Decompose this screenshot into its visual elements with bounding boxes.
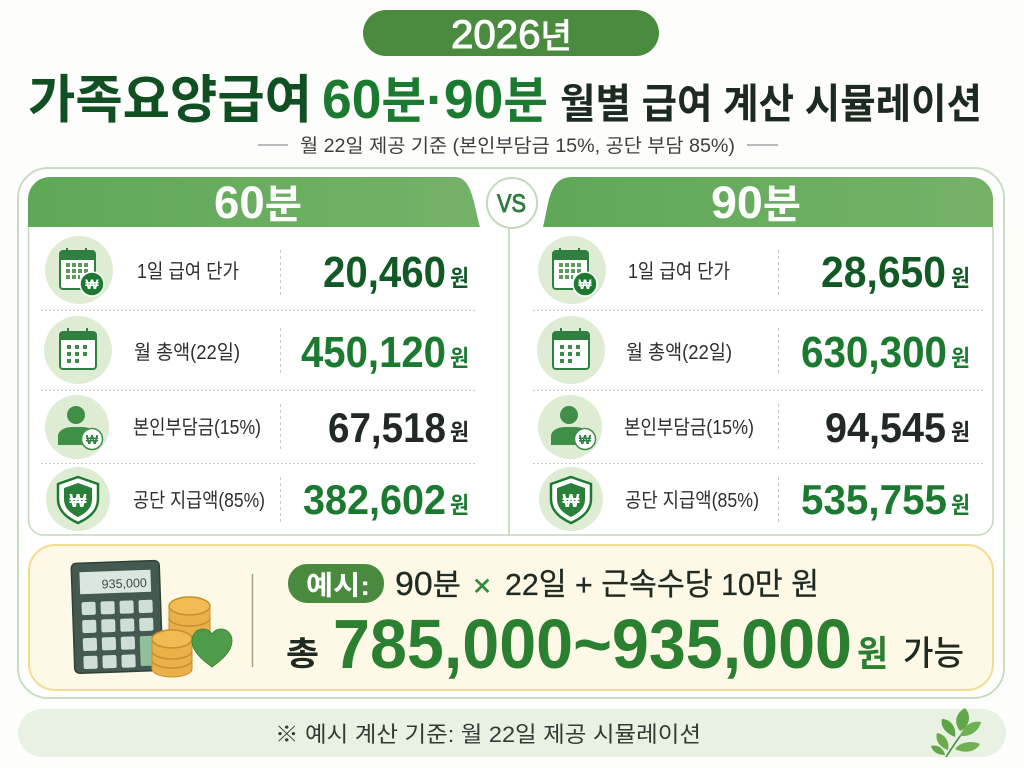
- icon: person with won: [45, 395, 109, 459]
- row: 본인부담금: [538, 395, 970, 459]
- title: [28, 68, 982, 130]
- panel: 60분: [28, 177, 509, 535]
- row: 월 총액: 월 총액(22일): [626, 341, 732, 364]
- icon: calendar: [44, 316, 112, 384]
- icon: calendar with won: ₩: [85, 276, 99, 292]
- year pill: [363, 10, 659, 57]
- row: 1일 급여 단가: 원: [951, 265, 970, 291]
- row: 공단 지급액: [46, 467, 469, 531]
- total amount: 원: [857, 633, 888, 674]
- icon: calculator, coins and heart: 935,000: [101, 576, 147, 591]
- row: 월 총액: 630,300: [801, 328, 947, 377]
- example formula: 22일 + 근속수당 10만 원: [505, 567, 819, 602]
- icon: calendar with won: ₩: [578, 276, 592, 292]
- icon: person with won: ₩: [579, 432, 592, 447]
- row: 본인부담금: [45, 395, 469, 459]
- subtitle: 월 22일 제공 기준 (본인부담금 15%, 공단 부담 85%): [300, 135, 735, 157]
- row: 공단 지급액: 공단 지급액(85%): [133, 489, 265, 512]
- icon: calendar: [537, 316, 605, 384]
- row: 1일 급여 단가: [538, 236, 970, 304]
- row: 본인부담금: 원: [951, 419, 970, 445]
- row: 1일 급여 단가: 1일 급여 단가: [628, 260, 730, 283]
- total amount: 785,000~935,000: [333, 605, 852, 683]
- icon: calendar with won: [45, 236, 113, 304]
- heading: 60분: [28, 177, 480, 228]
- heading: 60분: 60분: [214, 177, 302, 228]
- row: 공단 지급액: [539, 467, 970, 531]
- example formula: 90분: [395, 565, 461, 602]
- row: 월 총액: 450,120: [301, 328, 446, 377]
- example pill: [288, 564, 384, 603]
- title: 월별 급여 계산 시뮬레이션: [560, 81, 982, 127]
- row: 1일 급여 단가: 28,650: [821, 248, 946, 297]
- example formula: [395, 565, 819, 603]
- row: 본인부담금: 본인부담금(15%): [133, 416, 261, 439]
- row: 1일 급여 단가: 원: [450, 265, 469, 291]
- total amount: 가능: [903, 635, 964, 673]
- VS badge: [487, 178, 537, 228]
- row: 본인부담금: 67,518: [328, 404, 446, 451]
- row: 공단 지급액: 원: [450, 492, 469, 518]
- row: 본인부담금: 본인부담금(15%): [624, 416, 754, 439]
- panel: 90분: [509, 177, 993, 535]
- title: 가족요양급여: [28, 72, 312, 130]
- footer note: [18, 709, 1006, 757]
- icon: shield with won: [539, 467, 603, 531]
- row: 1일 급여 단가: 20,460: [323, 248, 446, 297]
- VS badge: VS: [497, 190, 526, 218]
- example pill: 예시:: [306, 571, 370, 601]
- icon: person with won: ₩: [86, 432, 99, 447]
- total amount: 총: [286, 635, 319, 672]
- year pill: 2026년: [451, 13, 572, 57]
- row: 월 총액: [537, 316, 970, 384]
- example formula: ×: [473, 568, 491, 603]
- row: 본인부담금: 원: [450, 419, 469, 445]
- row: 월 총액: 월 총액(22일): [134, 341, 240, 364]
- row: 공단 지급액: 382,602: [303, 476, 446, 523]
- callout: example: [29, 545, 993, 690]
- row: 월 총액: 원: [450, 345, 469, 371]
- heading: 90분: 90분: [711, 177, 801, 228]
- row: 1일 급여 단가: 1일 급여 단가: [137, 260, 239, 283]
- outer panel: [18, 168, 1004, 698]
- icon: shield with won: ₩: [70, 491, 86, 511]
- icon: leaf sprig: [931, 708, 981, 757]
- row: 월 총액: [44, 316, 469, 384]
- footer note: ※ 예시 계산 기준: 월 22일 제공 시뮬레이션: [275, 722, 701, 747]
- icon: person with won: [538, 395, 602, 459]
- row: 1일 급여 단가: [45, 236, 469, 304]
- row: 공단 지급액: 공단 지급액(85%): [625, 489, 759, 512]
- row: 본인부담금: 94,545: [825, 404, 946, 451]
- heading: 90분: [543, 177, 993, 228]
- row: 월 총액: 원: [951, 345, 970, 371]
- row: 공단 지급액: 535,755: [801, 476, 947, 523]
- icon: shield with won: [46, 467, 110, 531]
- row: 공단 지급액: 원: [951, 492, 970, 518]
- icon: calendar with won: [538, 236, 606, 304]
- icon: calculator, coins and heart: [71, 560, 232, 677]
- icon: shield with won: ₩: [562, 491, 580, 511]
- title: 60분·90분: [322, 68, 548, 130]
